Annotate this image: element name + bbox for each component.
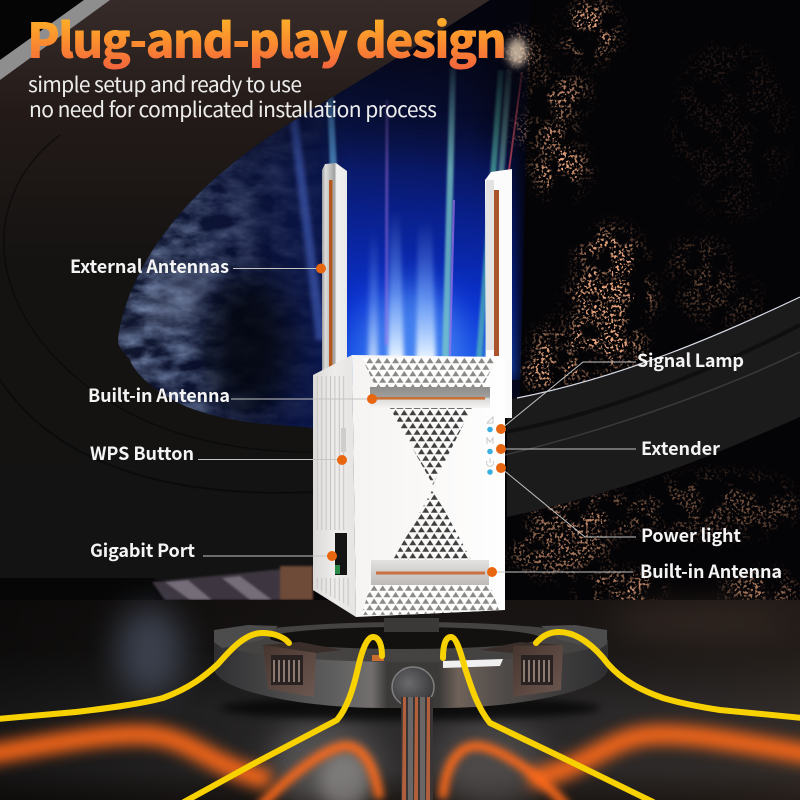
orange reflection on ring (372, 655, 384, 661)
title: Plug-and-play design (27, 2, 507, 72)
side ribs (316, 376, 352, 608)
top-left black corner (0, 0, 84, 60)
callout: Built-in Antenna left: Built-in Antenna (88, 382, 230, 408)
callout: Extender: Extender (641, 435, 720, 461)
rocky strip behind device (0, 566, 313, 600)
callout: WPS Button: WPS Button (90, 440, 194, 466)
pedestal base (214, 618, 608, 800)
top mesh triangle (390, 368, 492, 485)
ring top (220, 622, 600, 662)
side panel (313, 355, 356, 617)
floor (0, 600, 800, 800)
title-side light burst (507, 38, 527, 66)
rear left corner block (214, 625, 278, 648)
planet with clouds (110, 0, 530, 430)
white reflection (443, 659, 503, 668)
bottom slot with copper antenna (371, 560, 489, 585)
right external antenna (485, 169, 512, 418)
cable socket (392, 667, 434, 707)
callout: Power light (496, 463, 741, 548)
callout: External Antennas (70, 253, 326, 279)
centre cable (401, 697, 433, 800)
right vent block (480, 642, 563, 697)
status LEDs and icons (486, 417, 494, 475)
callout: Power light: Power light (641, 522, 741, 548)
ground shadow (220, 696, 600, 720)
ethernet port (335, 533, 347, 575)
Wi-Fi extender device (313, 355, 505, 617)
light rays (288, 68, 523, 405)
background: space scene (0, 0, 800, 600)
subtitle: simple setup and ready to use (28, 69, 302, 99)
callout: External Antennas: External Antennas (70, 253, 229, 279)
diagonal silver stripe (0, 0, 110, 80)
callout: Signal Lamp: Signal Lamp (637, 347, 744, 373)
left external antenna (322, 163, 347, 418)
antenna copper strip (494, 190, 499, 356)
callout: Gigabit Port: Gigabit Port (90, 537, 195, 563)
top-left dark band (0, 0, 490, 580)
callout: Built-in Antenna right: Built-in Antenna (640, 558, 782, 584)
top slot with copper antenna (370, 387, 490, 408)
orange glow reflections (0, 735, 800, 800)
callout: Built-in Antenna right (487, 558, 782, 584)
subtitle (28, 69, 437, 124)
left vent block (263, 642, 342, 697)
WPS button (341, 428, 346, 452)
black ring swoosh (0, 135, 800, 517)
callout: Built-in Antenna left (88, 382, 377, 408)
callout: WPS Button (90, 440, 347, 466)
front panel (352, 355, 505, 617)
bottom mesh triangle (362, 489, 500, 615)
ring body (214, 640, 608, 708)
rear right corner block (541, 625, 607, 649)
callout: Signal Lamp (496, 347, 744, 434)
callout: Gigabit Port (90, 537, 337, 563)
antenna copper strip (329, 180, 332, 402)
callout: Extender (496, 435, 720, 461)
subtitle: no need for complicated installation process (29, 94, 437, 124)
yellow cables (0, 632, 800, 800)
city lights speckle (480, 0, 800, 610)
